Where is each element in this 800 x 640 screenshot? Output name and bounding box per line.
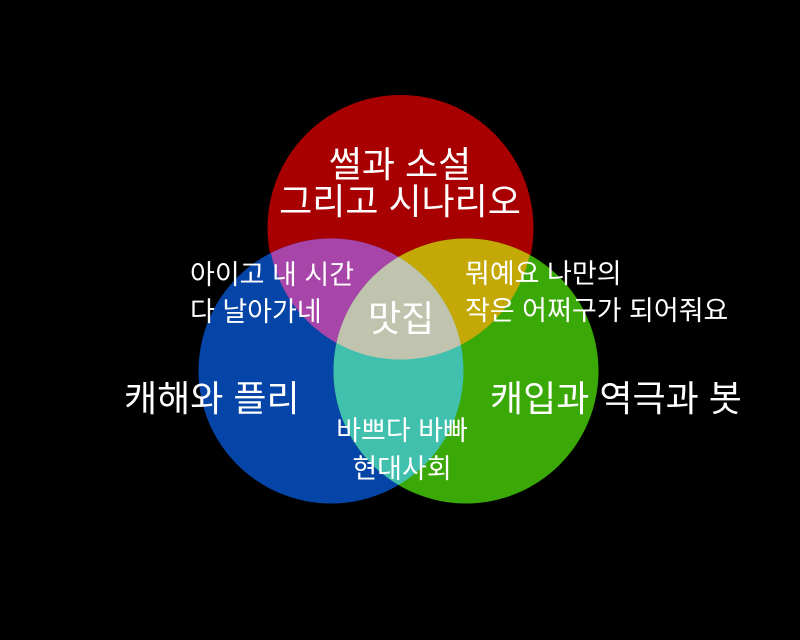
label: blue and green overlap bbox=[336, 416, 468, 484]
overlap: red and blue bbox=[271, 238, 398, 343]
label: red circle: 그리고 시나리오 bbox=[279, 181, 521, 222]
circle: green bbox=[334, 238, 598, 504]
label: red and blue overlap: 다 날아가네 bbox=[190, 297, 322, 327]
label: center: 맛집 bbox=[368, 298, 434, 339]
label: blue and green overlap: 바쁘다 바빠 bbox=[336, 416, 468, 446]
label: red and blue overlap: 아이고 내 시간 bbox=[190, 260, 354, 290]
overlap: center bbox=[336, 257, 461, 360]
venn diagram infographic bbox=[126, 95, 740, 504]
label: red and blue overlap bbox=[190, 260, 354, 327]
circle: blue bbox=[198, 238, 464, 504]
overlap: blue and green bbox=[334, 257, 464, 485]
label: green circle: 캐입과 역극과 봇 bbox=[490, 378, 742, 419]
label: blue and green overlap: 현대사회 bbox=[352, 454, 452, 484]
label: red and green overlap: 작은 어쩌구가 되어줘요 bbox=[465, 296, 728, 326]
circle: red bbox=[268, 95, 534, 361]
overlap: red and green bbox=[336, 238, 530, 345]
label: red and green overlap bbox=[465, 259, 728, 326]
label: red circle bbox=[279, 144, 521, 222]
label: red circle: 썰과 소설 bbox=[329, 144, 471, 185]
label: red and green overlap: 뭐예요 나만의 bbox=[465, 259, 622, 289]
label: blue circle: 캐해와 플리 bbox=[124, 378, 300, 419]
